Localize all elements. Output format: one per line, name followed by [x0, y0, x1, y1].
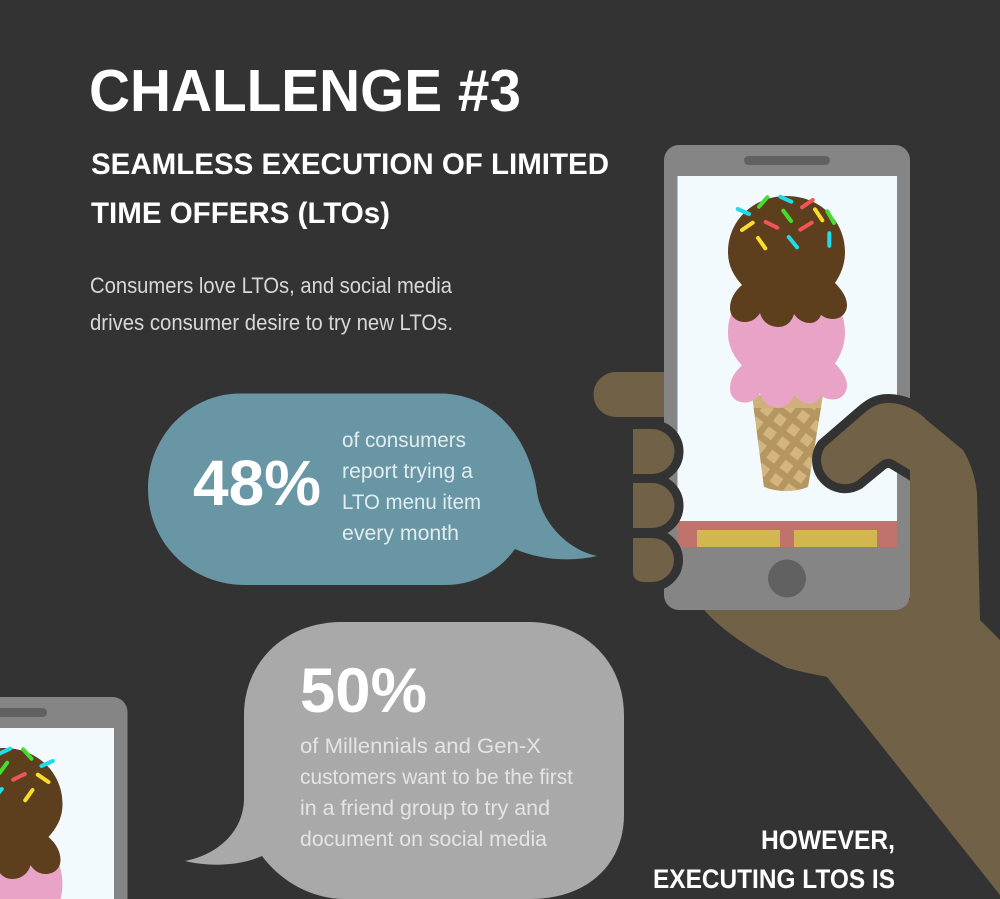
chocolate scoop	[728, 196, 847, 327]
second phone, cropped at left	[0, 697, 128, 899]
mirrored chocolate scoop with sprinkles	[0, 748, 62, 879]
hand: palm and wrist	[705, 600, 1000, 895]
cone	[752, 395, 823, 491]
hand: three gripping fingers	[633, 429, 675, 582]
phone speaker	[744, 156, 830, 165]
intro text: drives consumer desire to try new LTOs.	[90, 310, 453, 335]
bubble text: 50%: customers want to be the first	[300, 766, 573, 789]
closing text: EXECUTING LTOS IS	[653, 864, 895, 894]
speech bubble: 48%	[148, 394, 597, 585]
bubble text: 50%: document on social media	[300, 828, 547, 851]
title: CHALLENGE #3	[89, 58, 521, 124]
closing text: HOWEVER,	[761, 825, 895, 855]
subheading: TIME OFFERS (LTOs)	[91, 197, 390, 230]
bubble text: 50%	[300, 735, 573, 851]
sprinkles	[738, 197, 834, 248]
phone body	[664, 145, 910, 610]
phone body	[0, 697, 128, 899]
screen button bar	[678, 521, 897, 547]
hand: thumb	[821, 403, 925, 484]
bubble text: 48%: of consumers	[342, 429, 466, 452]
pink scoop	[0, 825, 63, 899]
pink scoop	[728, 276, 847, 408]
hand: back of hand	[910, 408, 980, 620]
phone screen	[0, 728, 114, 899]
closing text	[653, 825, 895, 894]
illustration: hand holding phone with ice cream	[594, 145, 1000, 895]
bubble text: 50%: of Millennials and Gen-X	[300, 735, 541, 758]
phone home button	[768, 560, 806, 598]
bubble text: 48%: every month	[342, 522, 459, 545]
subheading	[91, 148, 609, 230]
ice cream	[728, 196, 847, 498]
stat: 48%: 48%	[193, 447, 321, 519]
intro text	[90, 273, 453, 335]
phone speaker	[0, 708, 47, 717]
bubble text: 50%: in a friend group to try and	[300, 797, 550, 820]
stat: 50%: 50%	[300, 656, 427, 726]
subheading: SEAMLESS EXECUTION OF LIMITED	[91, 148, 609, 181]
hand: index finger behind phone	[594, 372, 680, 417]
bubble text: 48%: report trying a	[342, 460, 473, 483]
intro text: Consumers love LTOs, and social media	[90, 273, 453, 298]
bubble text: 48%: LTO menu item	[342, 491, 481, 514]
speech bubble: 50%	[185, 622, 624, 899]
bubble text: 48%	[342, 429, 481, 545]
phone screen	[678, 176, 897, 547]
